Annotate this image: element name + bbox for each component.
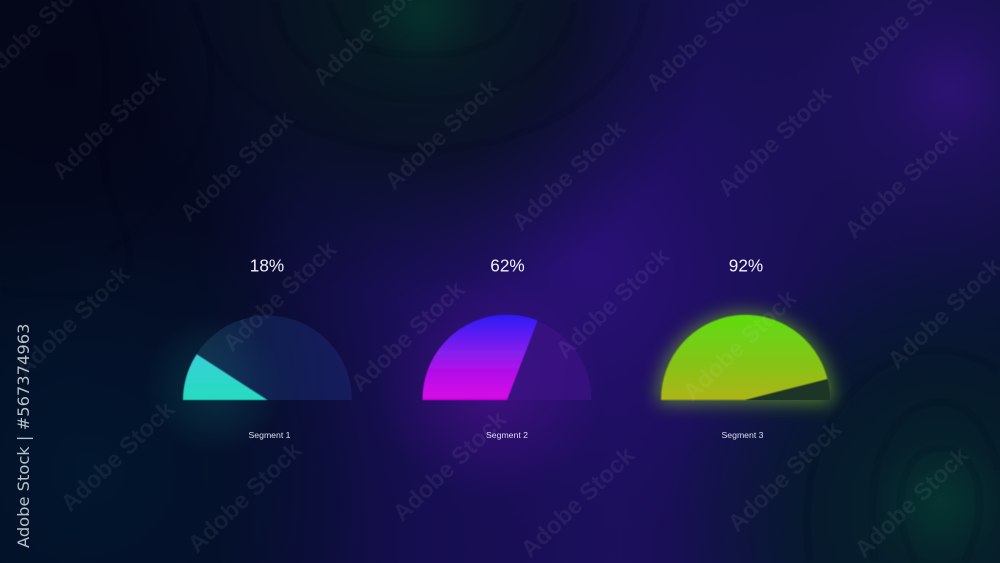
value: 62%: 62% [490,256,525,276]
watermarks: Adobe Stock: Adobe Stock [551,242,675,364]
watermarks: Adobe Stock: Adobe Stock [218,235,342,357]
gauge fill: segment 1, 18% [183,354,268,400]
gauge fill: segment 3, 92% [661,315,828,400]
halo: segment 3 glow [661,316,830,400]
watermarks: Adobe Stock: Adobe Stock [47,63,171,185]
panel: segment 2 gauge [375,256,605,500]
panel: segment 3 gauge [661,256,830,440]
label: Segment 1: Segment 1 [248,430,291,440]
watermarks: Adobe Stock: Adobe Stock [346,275,470,397]
side credit: Adobe Stock id: Adobe Stock | #567374963 [14,324,33,548]
watermarks: Adobe Stock: Adobe Stock [723,415,847,537]
watermarks: Adobe Stock: Adobe Stock [850,441,974,563]
watermarks: Adobe Stock: Adobe Stock [56,395,180,517]
value: 18%: 18% [250,256,284,276]
watermarks: Adobe Stock: Adobe Stock [11,260,135,382]
watermarks: Adobe Stock: Adobe Stock [183,436,307,558]
watermarks: Adobe Stock: Adobe Stock [507,114,631,236]
label: Segment 3: Segment 3 [721,430,764,440]
gauge track: segment 1 [183,316,352,400]
watermarks: Adobe Stock: Adobe Stock [516,441,640,563]
halo: segment 1 glow [145,315,285,455]
watermarks: Adobe Stock: Adobe Stock [840,122,964,244]
watermarks: Adobe Stock: Adobe Stock [713,80,837,202]
value: 92%: 92% [729,256,763,276]
halo: segment 2 glow [375,270,605,500]
watermarks: Adobe Stock: Adobe Stock [388,405,512,527]
gauge fill: segment 2, 62% [422,315,538,400]
watermarks: Adobe Stock: Adobe Stock [678,284,802,406]
gauge track: segment 2 [422,316,592,400]
panel: segment 1 gauge [145,256,352,455]
watermarks: Adobe Stock: Adobe Stock [175,105,299,227]
gauge track: segment 3 [661,316,830,400]
watermarks: Adobe Stock: Adobe Stock [380,73,504,195]
label: Segment 2: Segment 2 [486,430,528,440]
